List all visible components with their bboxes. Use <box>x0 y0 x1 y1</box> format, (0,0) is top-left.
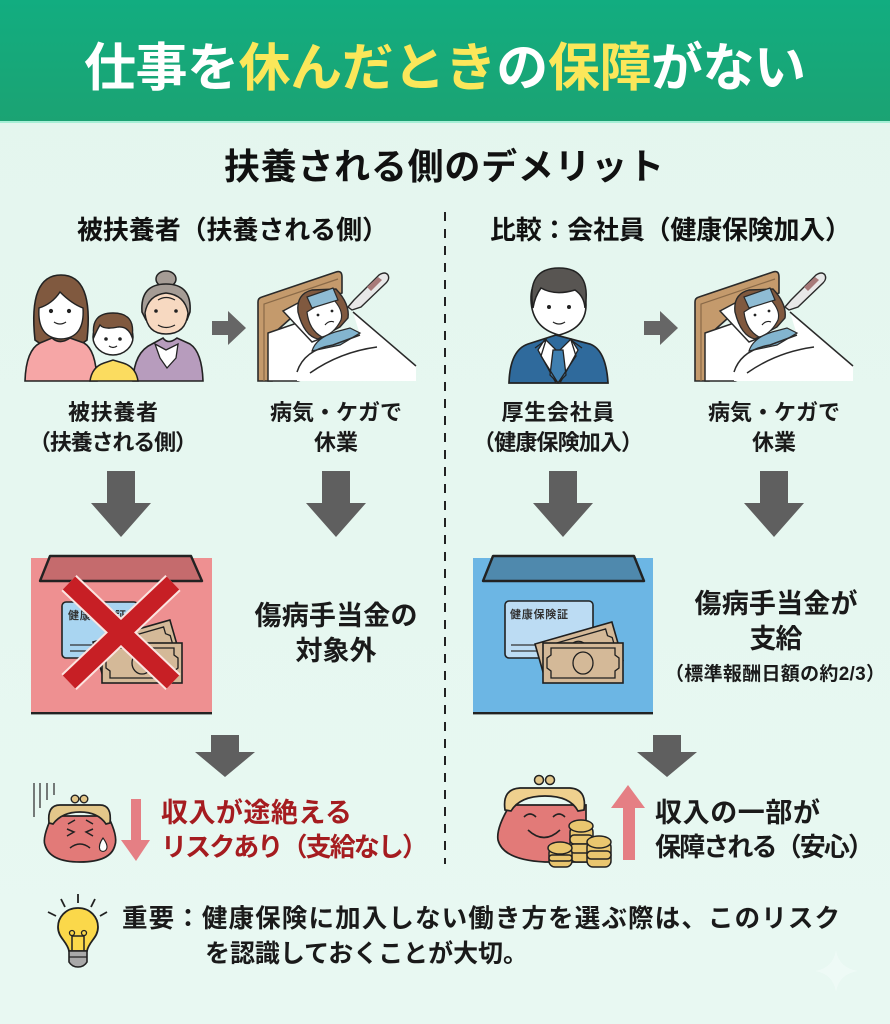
arrow: income down <box>121 799 150 861</box>
text: income protected: 保障される（安心） <box>655 832 874 862</box>
icon: red envelope crossed out <box>31 556 212 714</box>
icon: happy purse with coins <box>498 776 611 867</box>
text: income risk <box>161 797 428 862</box>
arrow: employee to sick <box>644 311 678 345</box>
icon: blue envelope with card and money <box>473 556 653 714</box>
text: income protected <box>655 797 874 862</box>
arrow: down second <box>306 471 366 537</box>
text: income protected: 収入の一部が <box>655 797 820 828</box>
right column heading: 比較：会社員（健康保険加入） <box>490 215 851 245</box>
text: benefit paid <box>665 588 885 685</box>
arrow: down to coverage <box>637 735 697 777</box>
label: sick leave <box>708 400 840 455</box>
subtitle: 扶養される側のデメリット <box>224 146 664 187</box>
column divider <box>444 212 446 864</box>
label: employee <box>473 400 643 455</box>
title banner: 仕事を休んだときの保障がない <box>84 40 806 98</box>
icon: office worker <box>509 268 608 383</box>
callout: important note: 重要：健康保険に加入しない働き方を選ぶ際は、このリスク <box>122 905 840 933</box>
label: sick leave: 休業 <box>752 430 796 455</box>
icon: sad purse <box>34 783 116 862</box>
icon: sick in bed <box>258 272 416 381</box>
arrow: down third <box>533 471 593 537</box>
text: income risk: リスクあり（支給なし） <box>161 832 428 862</box>
label: dependent <box>29 400 197 455</box>
arrow: down to risk <box>195 735 255 777</box>
panel: dependent column <box>25 271 428 862</box>
arrow: income up <box>611 785 645 860</box>
arrow: down left <box>91 471 151 537</box>
callout: important note: を認識しておくことが大切。 <box>205 939 528 968</box>
label: sick leave: 休業 <box>314 430 358 455</box>
text: benefit paid: （標準報酬日額の約2/3） <box>665 663 885 685</box>
text: income risk: 収入が途絶える <box>161 797 352 828</box>
icon: sick in bed <box>695 272 853 381</box>
arrow: dependent to sick <box>212 311 246 345</box>
panel: employee column <box>473 268 885 867</box>
text: not eligible: 対象外 <box>296 636 376 666</box>
label: sick leave <box>270 400 402 455</box>
icon: blue envelope with card and money: 健康保険証 <box>510 607 568 621</box>
text: benefit paid: 傷病手当金が <box>694 588 858 619</box>
title banner <box>0 0 890 123</box>
arrow: down fourth <box>744 471 804 537</box>
label: sick leave: 病気・ケガで <box>270 400 402 425</box>
text: not eligible <box>254 601 418 666</box>
icon: light bulb <box>48 894 107 967</box>
icon: family of dependents <box>25 271 203 381</box>
label: dependent: （扶養される側） <box>29 430 197 455</box>
label: employee: 厚生会社員 <box>502 400 614 425</box>
text: benefit paid: 支給 <box>750 624 802 654</box>
label: dependent: 被扶養者 <box>68 400 158 425</box>
left column heading: 被扶養者（扶養される側） <box>77 215 388 245</box>
label: employee: （健康保険加入） <box>473 430 643 455</box>
callout: important note <box>122 905 840 968</box>
text: not eligible: 傷病手当金の <box>254 601 418 631</box>
icon: red envelope crossed out: 健康保険証 <box>68 608 126 622</box>
icon: sparkle <box>815 950 858 992</box>
label: sick leave: 病気・ケガで <box>708 400 840 425</box>
